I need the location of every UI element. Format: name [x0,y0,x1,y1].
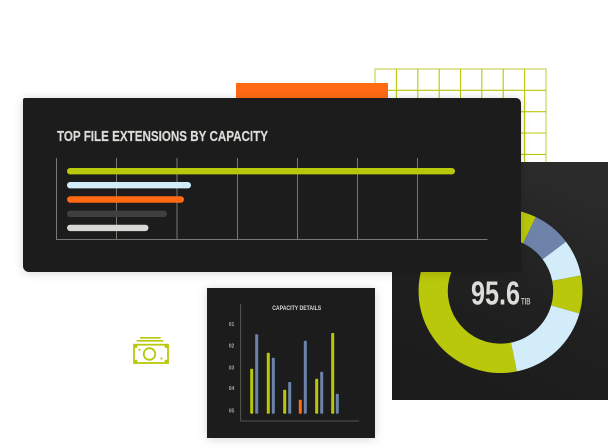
panel: top file extensions [23,98,521,272]
donut unit: TIB [521,296,531,306]
small chart axis labels: 03 [229,366,234,372]
grid decoration [375,69,546,169]
donut panel background [392,162,608,400]
donut chart [419,209,583,373]
main chart gridlines and axes [56,158,488,240]
panel: capacity details [207,288,375,438]
main chart title: TOP FILE EXTENSIONS BY CAPACITY [57,129,268,145]
small chart axis labels [229,322,234,414]
orange block [236,83,388,103]
donut total value: 95.6 [471,274,520,312]
small chart axis labels: 04 [229,386,234,392]
panel: donut chart [392,162,608,400]
small chart bars [250,333,339,414]
small chart title: CAPACITY DETAILS [272,306,321,312]
small chart axis labels: 05 [229,408,234,414]
small panel background [207,288,375,438]
small chart axes [241,304,359,421]
icon: banknotes [134,338,168,363]
main panel background [23,98,521,272]
small chart axis labels: 01 [229,322,234,328]
small chart axis labels: 02 [229,344,234,350]
horizontal bars [67,168,455,231]
